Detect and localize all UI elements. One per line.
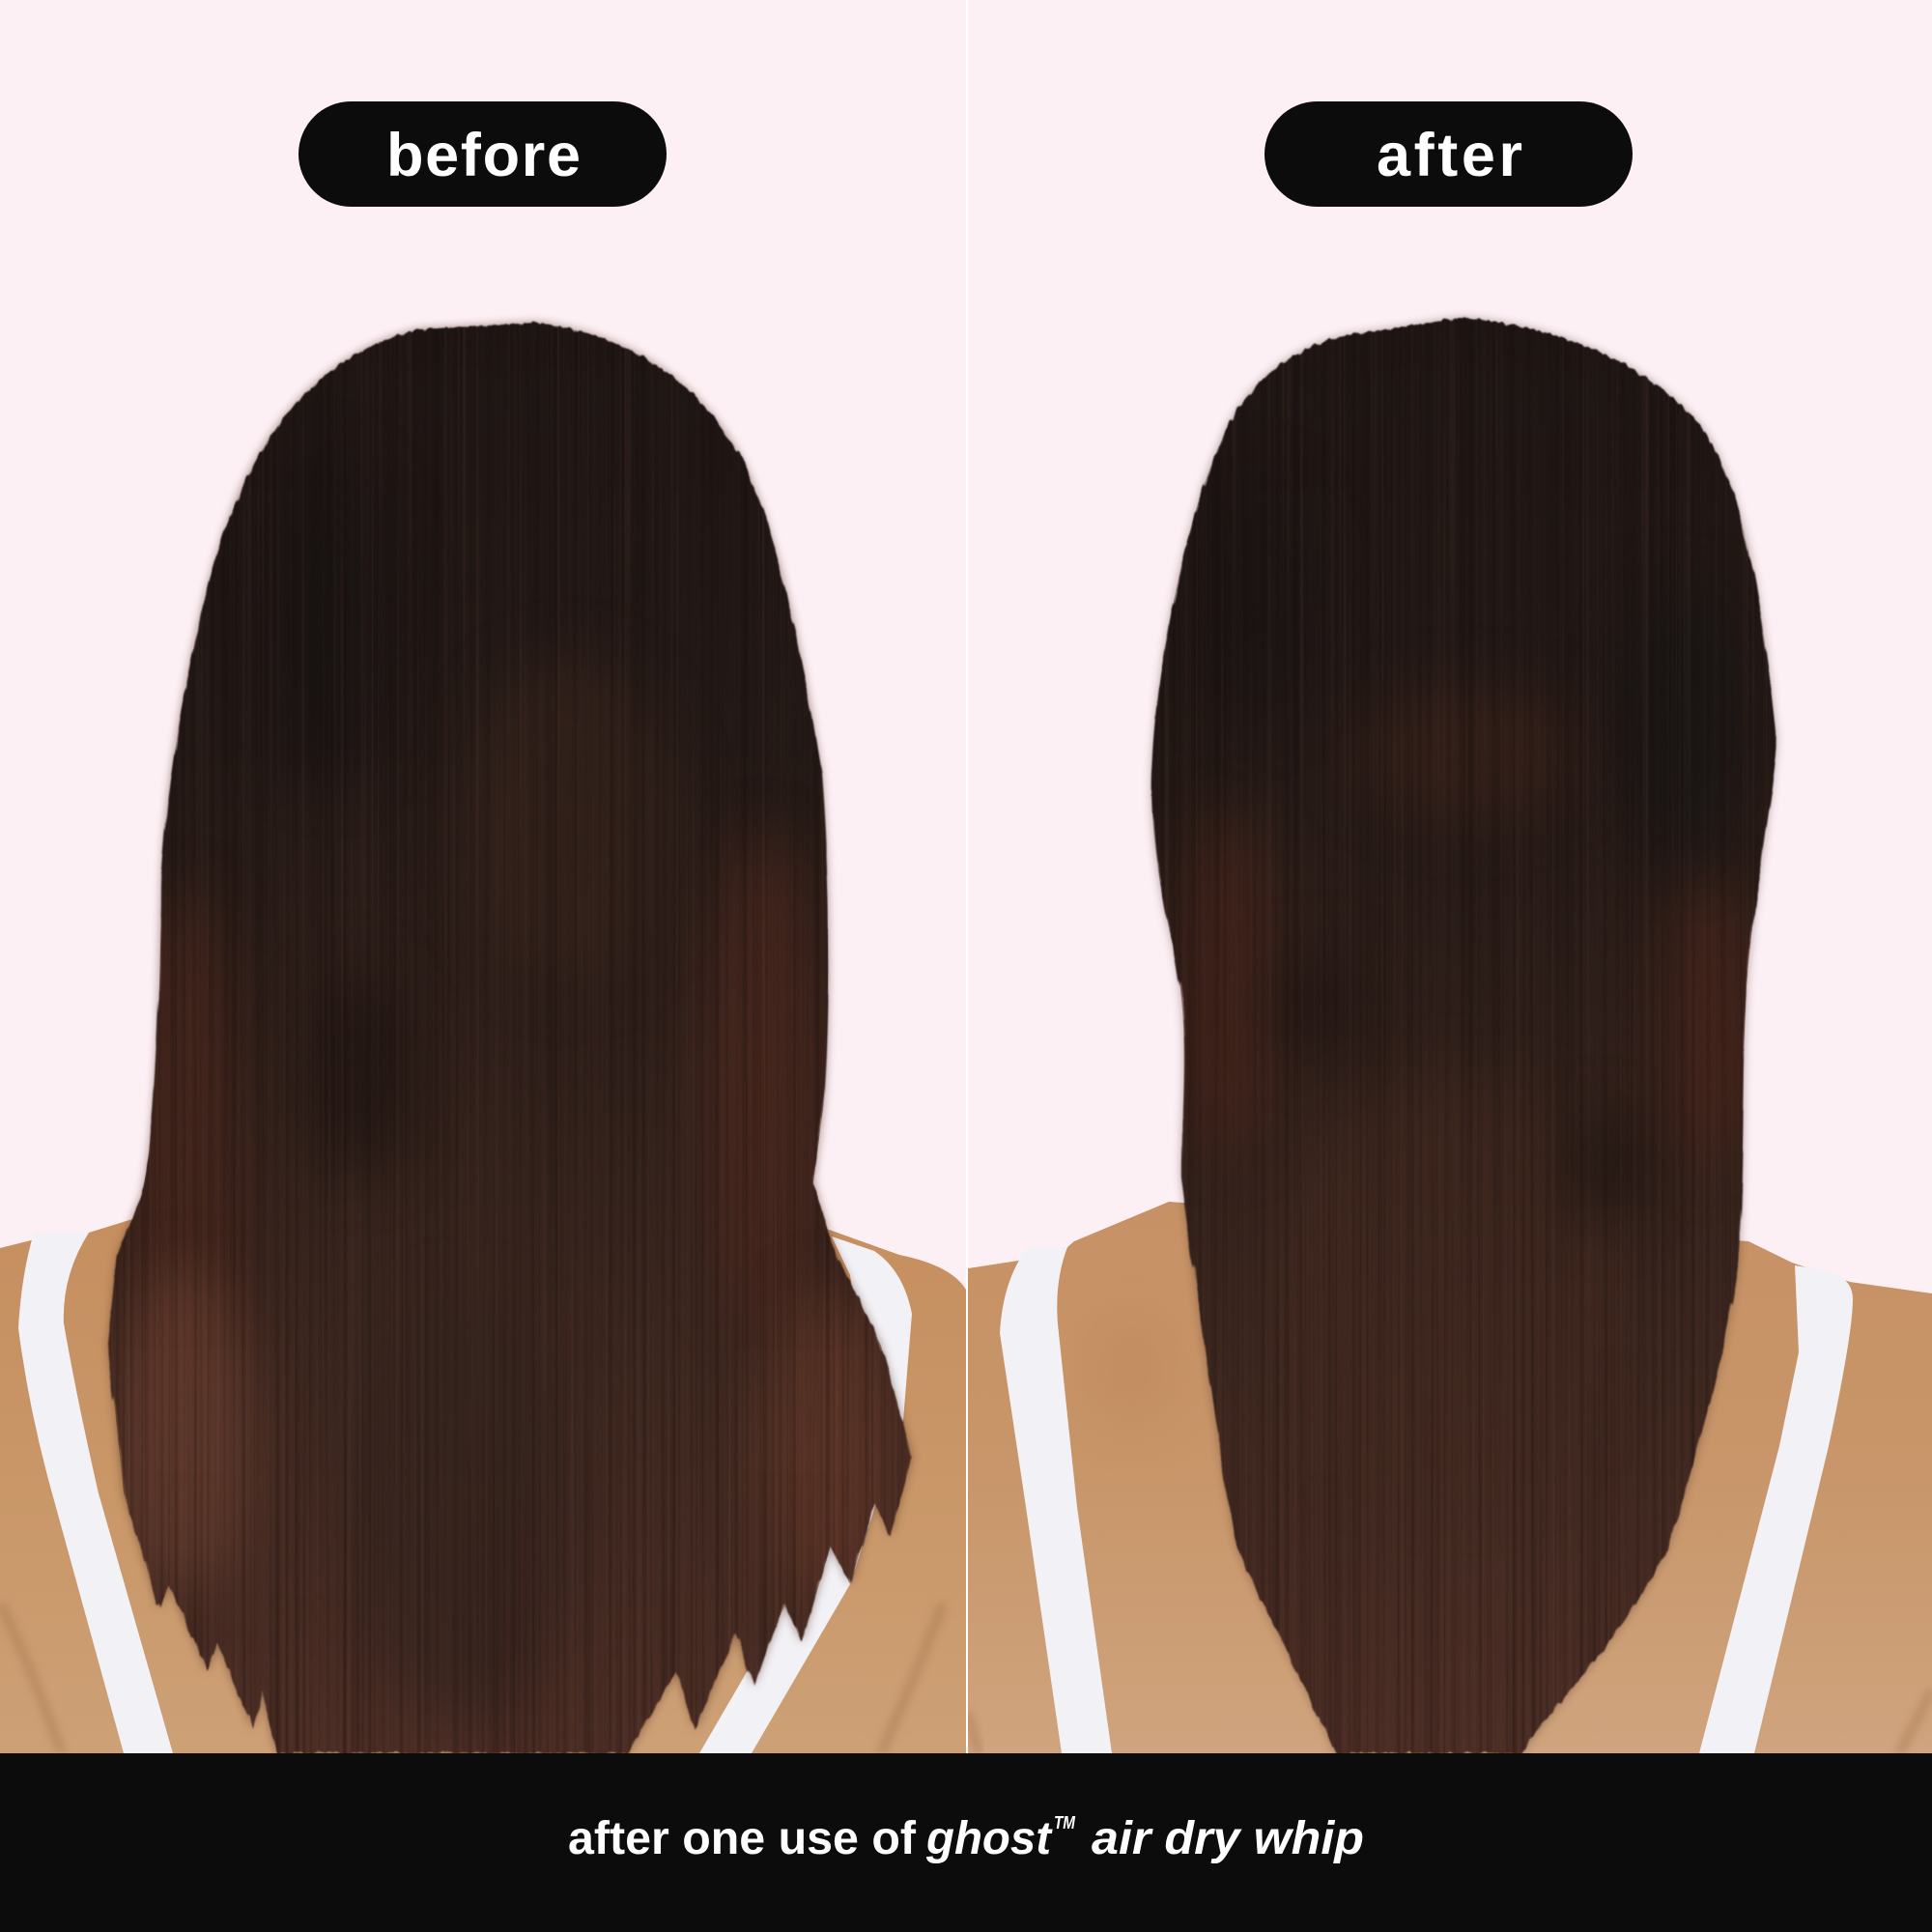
footer banner xyxy=(0,1753,1932,1932)
white strap: right xyxy=(699,1236,912,1753)
divider between panels xyxy=(966,0,968,1753)
caption: after one use of xyxy=(568,1813,917,1864)
label: after xyxy=(1264,101,1633,207)
caption: air dry whip xyxy=(1092,1813,1364,1864)
white strap: left xyxy=(18,1233,173,1753)
white strap: left xyxy=(1000,1247,1112,1753)
caption: ghost xyxy=(925,1813,1053,1864)
back and shoulders: before xyxy=(0,1215,966,1753)
panel: after xyxy=(968,312,1932,1753)
white strap: right xyxy=(1699,1265,1853,1753)
caption: TM xyxy=(1054,1813,1076,1833)
label: before: before xyxy=(386,122,581,189)
caption xyxy=(568,1813,1364,1864)
hair: after xyxy=(1130,309,1806,1753)
label: before xyxy=(298,101,667,207)
panel: before xyxy=(0,317,966,1753)
hair: before xyxy=(97,309,927,1753)
label: after: after xyxy=(1377,122,1522,189)
back and shoulders: after xyxy=(968,1202,1932,1753)
